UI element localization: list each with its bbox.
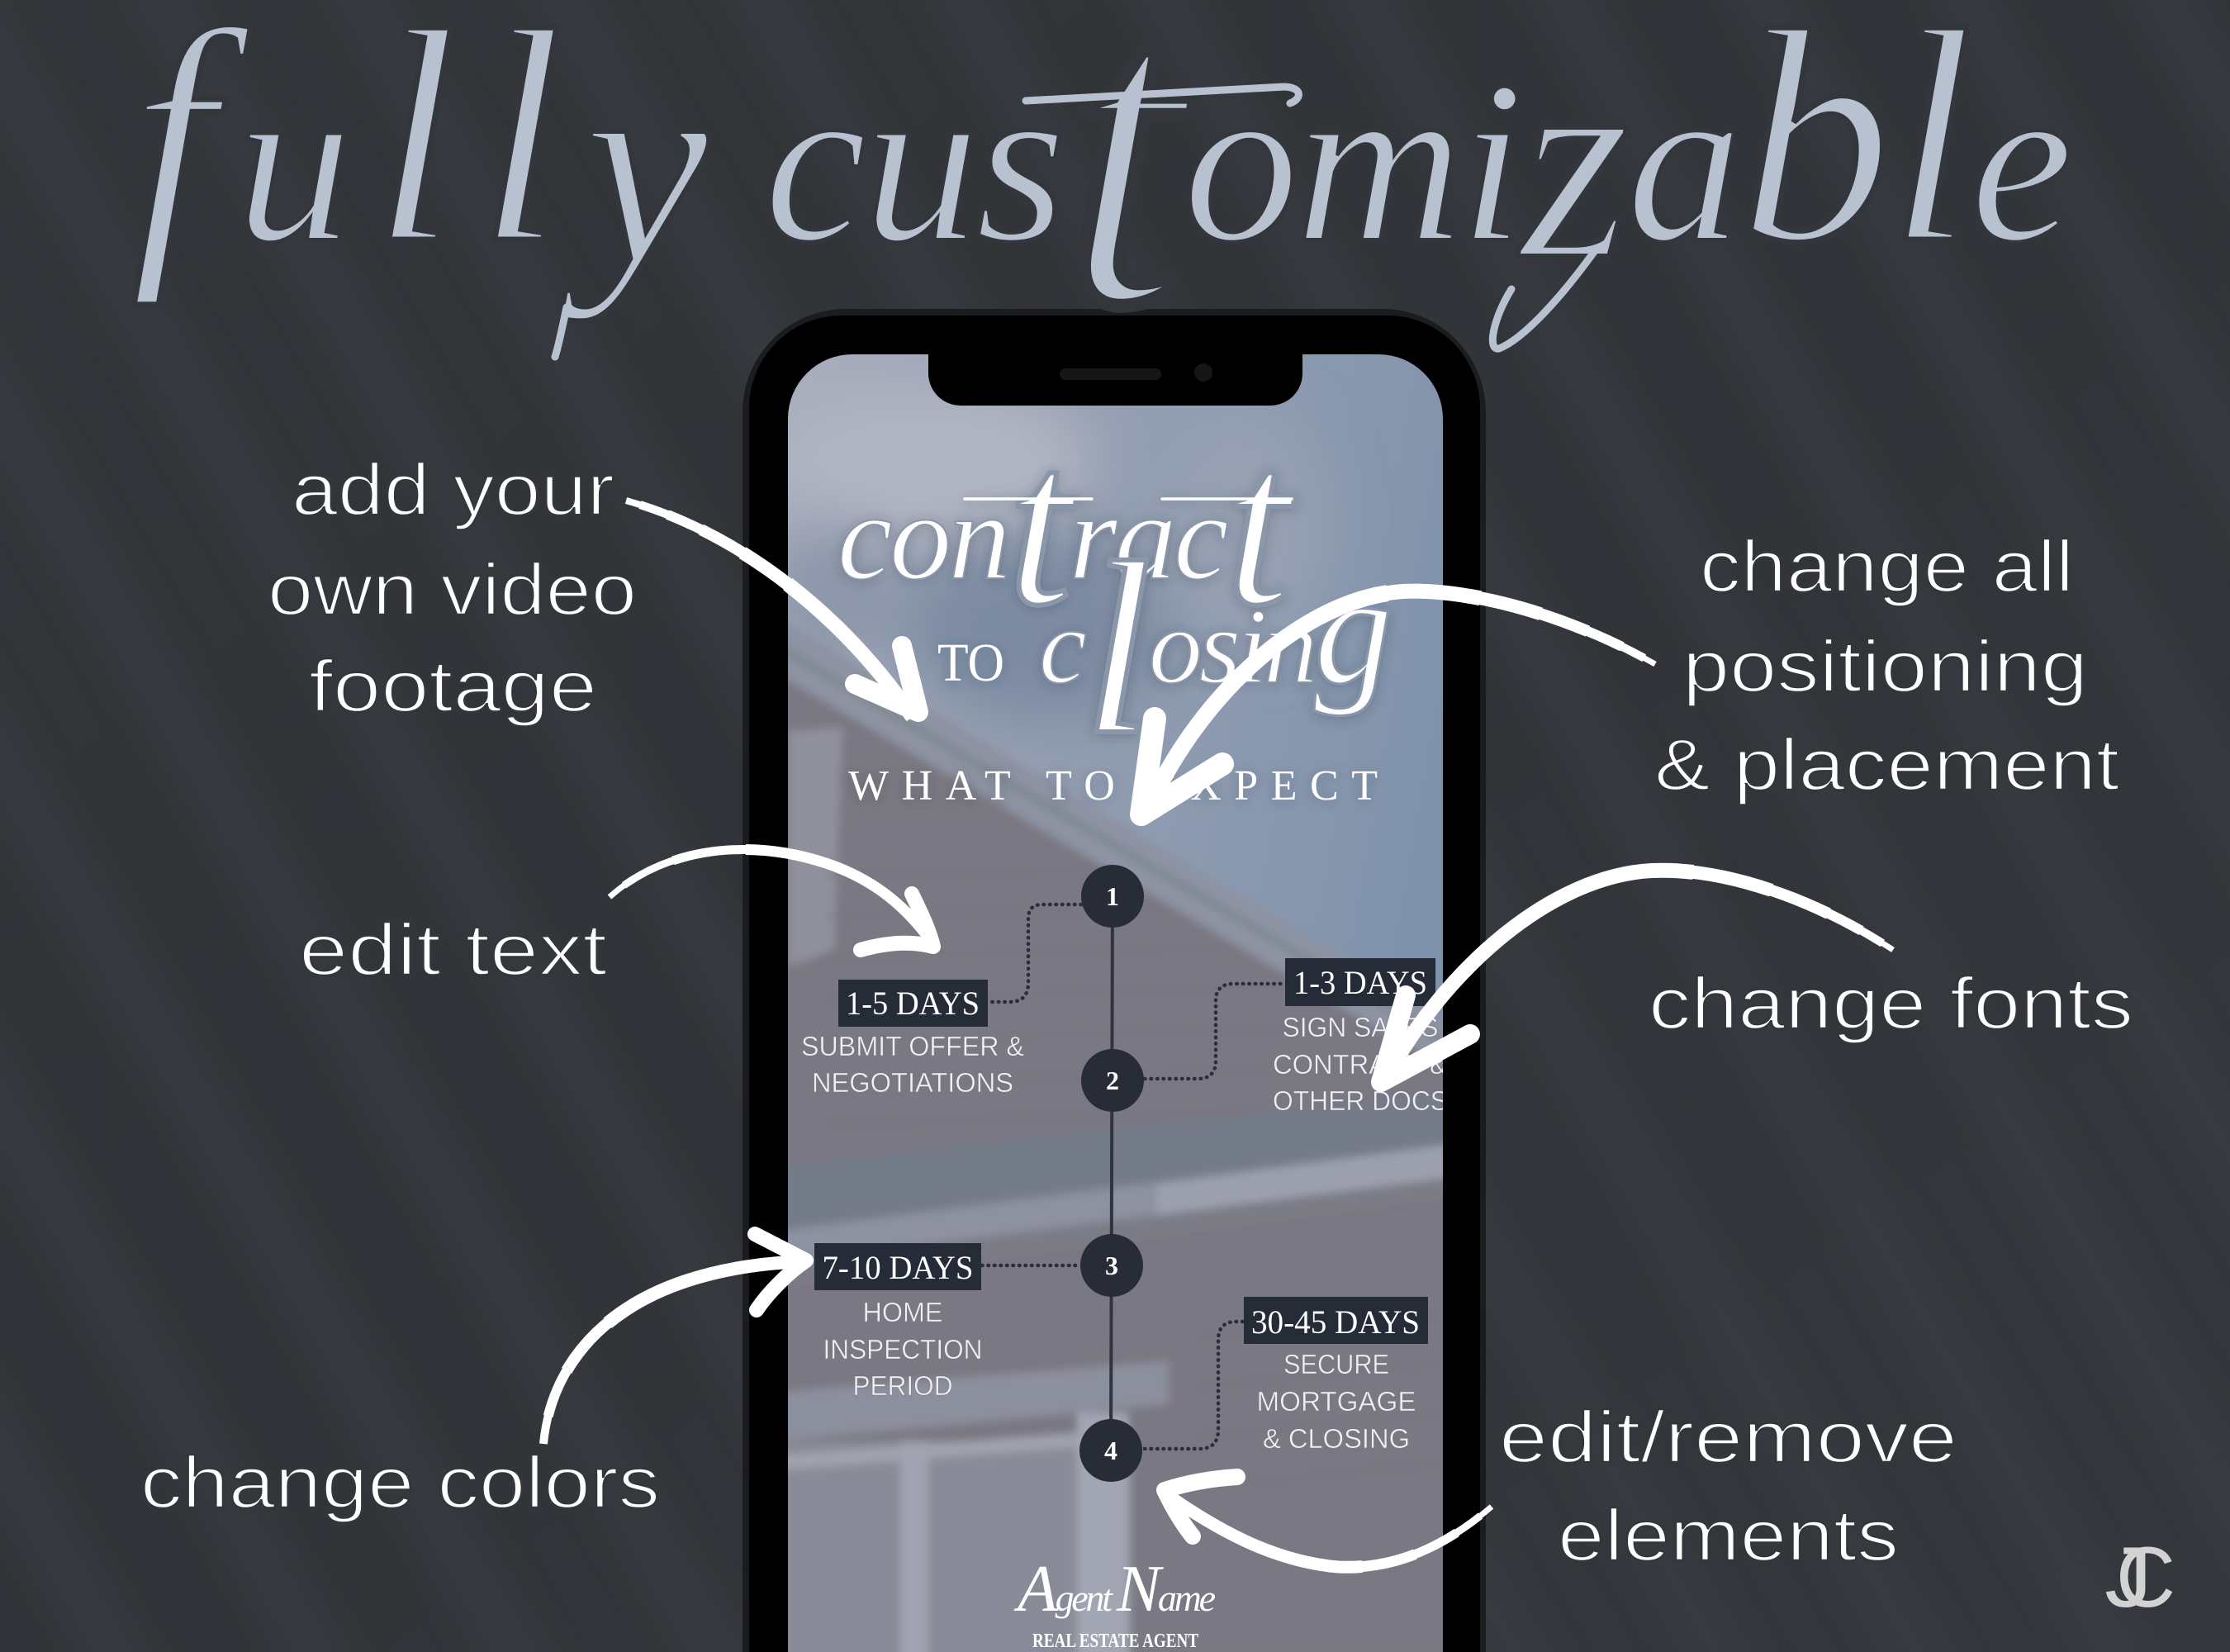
step 3 marker	[1080, 1234, 1143, 1297]
screen title: contract to closing: c	[1039, 587, 1087, 706]
arrow: edit text	[610, 850, 935, 950]
phone outer bezel	[743, 309, 1486, 1652]
label: change fonts: change fonts	[1649, 962, 2133, 1044]
phone black frame	[749, 316, 1480, 1652]
phone speaker	[1060, 368, 1161, 380]
timeline	[801, 865, 1448, 1482]
agent signature: REAL ESTATE AGENT	[1032, 1631, 1198, 1652]
step 1 marker	[1081, 865, 1144, 928]
step 3 label: 7-10 DAYS	[823, 1249, 973, 1286]
label: edit text: edit text	[299, 909, 607, 990]
timeline vertical line	[1111, 896, 1113, 1450]
step 4 marker	[1079, 1419, 1142, 1482]
step 3 label: HOME	[862, 1297, 943, 1327]
step 4 label	[1244, 1297, 1428, 1454]
screen title: contract to closing: g	[1314, 544, 1393, 717]
label: change all positioning and placement	[1654, 525, 2119, 805]
arrow: change fonts	[1381, 871, 1893, 1086]
arrow: change colors	[543, 1234, 806, 1444]
label: edit/remove elements: edit/remove	[1499, 1396, 1957, 1478]
phone screen	[768, 354, 1454, 1652]
title: fully customizable	[130, 0, 2073, 398]
step 3 label: PERIOD	[852, 1370, 953, 1401]
step 1 label: 1-5 DAYS	[846, 985, 980, 1022]
screen title: contract to closing	[836, 468, 1393, 802]
arrow: edit/remove elements	[1163, 1477, 1492, 1567]
label: add your own video footage: add your	[292, 449, 614, 530]
title flourish: crossbar and descender tails	[555, 87, 1594, 357]
screen title: contract to closing: con	[837, 468, 1011, 605]
step 1 label: SUBMIT OFFER &	[801, 1031, 1024, 1061]
label: change all positioning and placement: change all	[1700, 525, 2074, 607]
label: change all positioning and placement: positioning	[1682, 625, 2088, 707]
video still: sky and house	[768, 354, 1454, 1652]
title: fully customizable: a	[1627, 33, 1743, 290]
screen title: contract to closing: TO	[937, 633, 1004, 693]
screen title: contract to closing: rac	[1070, 468, 1229, 605]
title: fully customizable: cus	[764, 33, 1065, 290]
label: edit/remove elements	[1499, 1396, 1957, 1576]
step 4 label: MORTGAGE	[1257, 1386, 1416, 1417]
screen title: contract to closing: WHAT TO EXPECT	[848, 762, 1378, 809]
title: fully customizable: omi	[1184, 33, 1524, 290]
step 2 label: OTHER DOCS	[1273, 1085, 1448, 1116]
step 4 marker: 4	[1104, 1436, 1117, 1465]
title: fully customizable: z	[1516, 6, 1630, 317]
step 4 label: & CLOSING	[1263, 1423, 1410, 1454]
phone mockup	[743, 309, 1486, 1652]
step 1 marker: 1	[1106, 881, 1119, 911]
step 4 label: SECURE	[1283, 1349, 1389, 1379]
label: edit/remove elements: elements	[1558, 1494, 1899, 1576]
label: add your own video footage: footage	[309, 645, 597, 727]
step 2 marker: 2	[1106, 1066, 1119, 1095]
step 2 label: SIGN SALES	[1282, 1012, 1439, 1042]
screen title: contract to closing: osin	[1149, 587, 1317, 706]
crossbar flourishes	[965, 497, 1292, 501]
step 1 label: NEGOTIATIONS	[812, 1067, 1013, 1098]
arrow: change all positioning and placement	[1141, 591, 1655, 818]
screen title: contract to closing: l	[1084, 511, 1152, 786]
step 2 label: CONTRACT &	[1273, 1049, 1448, 1080]
step 3 marker: 3	[1105, 1251, 1118, 1280]
screen title: contract to closing: t	[1008, 396, 1080, 653]
dotted connectors	[982, 904, 1285, 1449]
phone camera	[1194, 363, 1212, 382]
step 2 label	[1273, 958, 1448, 1116]
step 2 marker	[1081, 1049, 1144, 1112]
logo: JC monogram: C	[2116, 1530, 2175, 1626]
step 3 label	[814, 1243, 983, 1401]
step 3 label: INSPECTION	[823, 1334, 983, 1365]
label: add your own video footage	[268, 449, 637, 727]
logo: JC monogram: J	[2104, 1530, 2152, 1626]
step 1 label	[801, 980, 1024, 1098]
label: change colors: change colors	[140, 1441, 660, 1523]
agent signature: Agent Name	[1013, 1553, 1216, 1626]
title: fully customizable: y	[558, 10, 711, 321]
step 4 label: 30-45 DAYS	[1251, 1303, 1420, 1341]
step 2 label: 1-3 DAYS	[1293, 964, 1427, 1001]
screen title: contract to closing: t	[1226, 396, 1298, 653]
label: change all positioning and placement: & placement	[1654, 724, 2119, 805]
label: add your own video footage: own video	[268, 548, 637, 630]
arrow: add your own video footage	[626, 501, 918, 717]
